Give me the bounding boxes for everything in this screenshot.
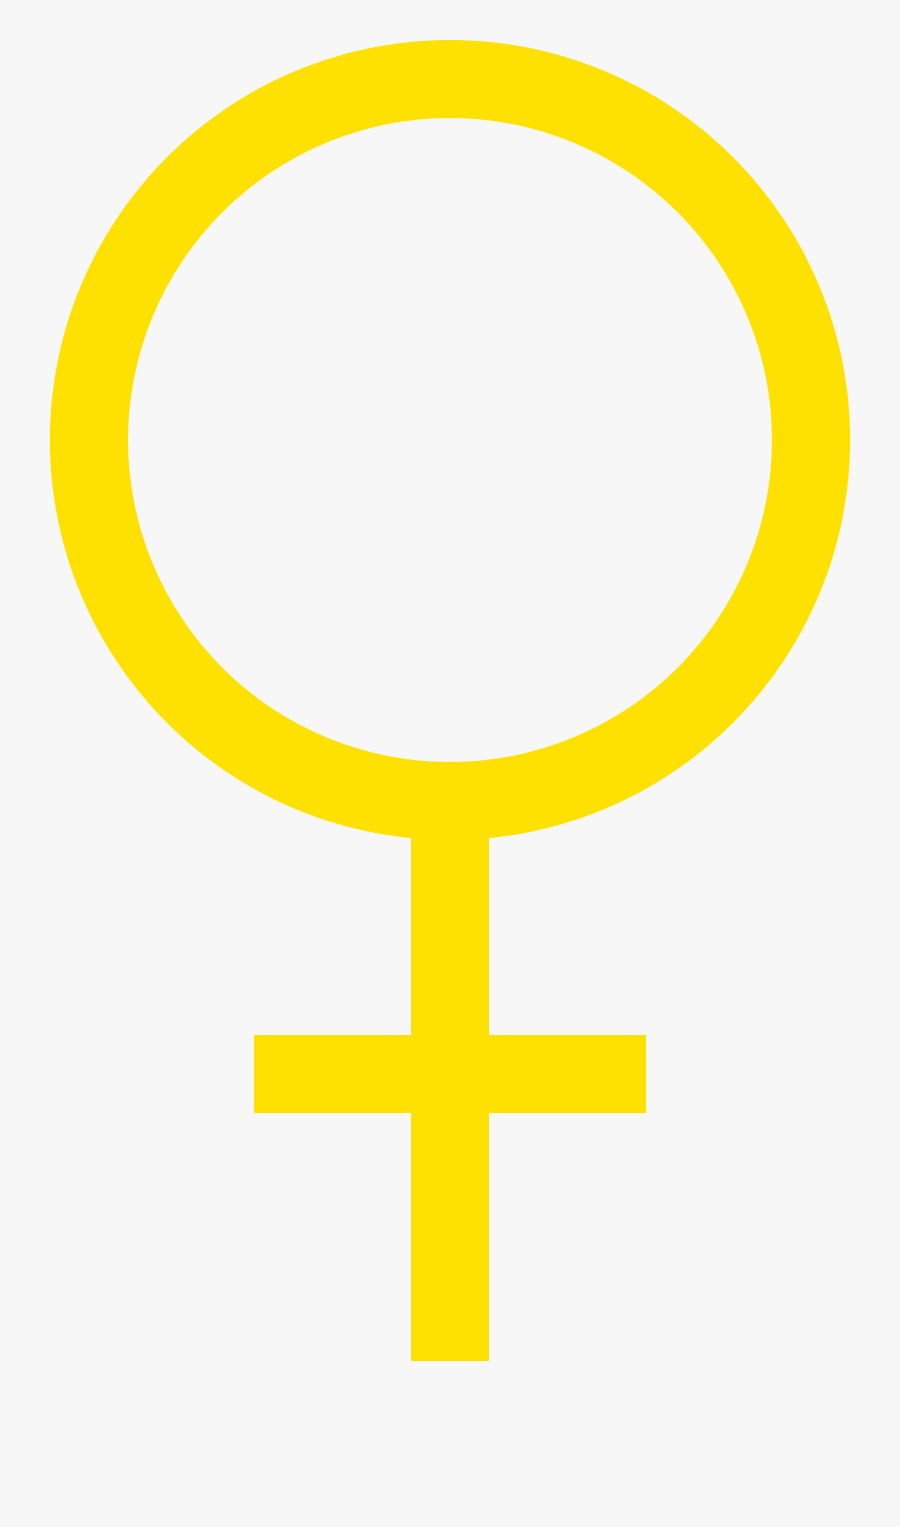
- vertical stem: [411, 800, 489, 1361]
- female symbol group: [50, 40, 850, 1361]
- crossbar: [254, 1035, 646, 1113]
- ring: [50, 40, 850, 840]
